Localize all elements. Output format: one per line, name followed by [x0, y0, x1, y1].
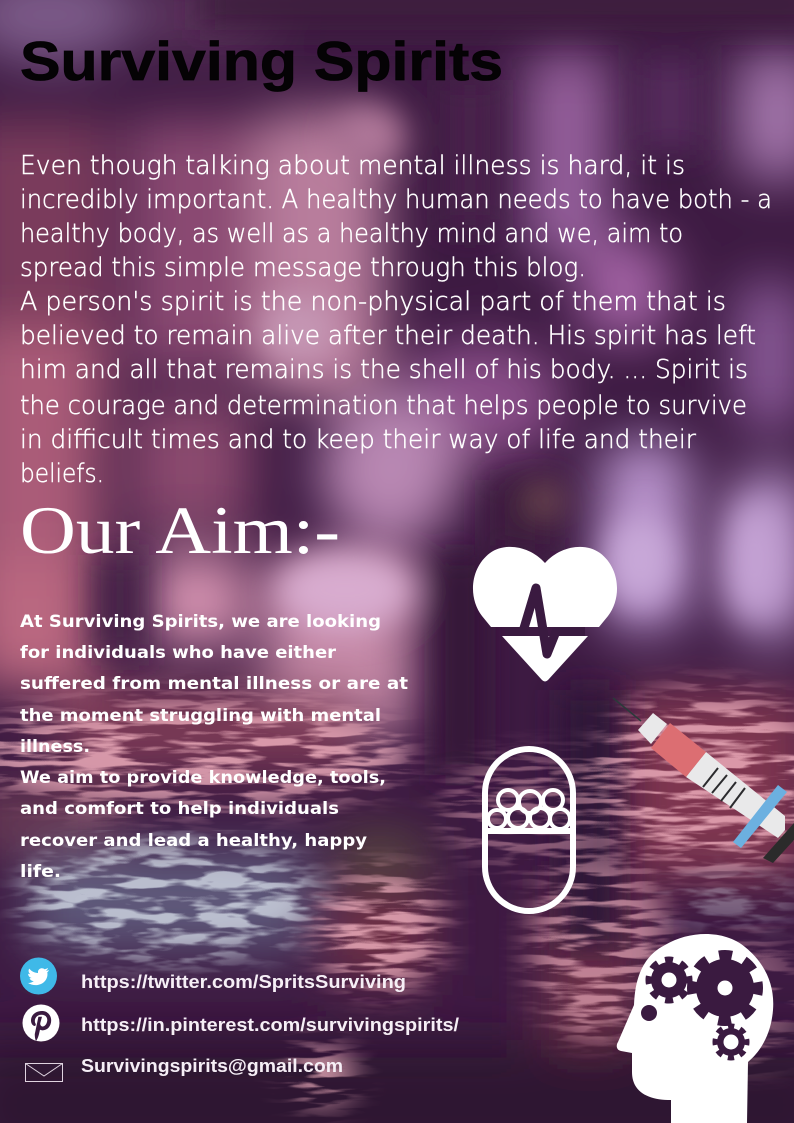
icon: capsule with pills: [485, 749, 573, 911]
icon: head with gears: [617, 934, 773, 1123]
intro paragraph: the courage and determination that helps people to survive: [20, 391, 747, 421]
aim paragraph: [20, 612, 408, 882]
twitter link: https://twitter.com/SpritsSurviving: [81, 972, 406, 992]
aim paragraph: recover and lead a healthy, happy: [20, 831, 367, 851]
icon: pinterest: [22, 1004, 60, 1042]
icon: twitter: [20, 958, 57, 994]
aim paragraph: suffered from mental illness or are at: [20, 674, 408, 694]
intro paragraph: [20, 151, 772, 489]
intro paragraph: him and all that remains is the shell of his body. ... Spirit is: [20, 355, 748, 385]
icon: heart with pulse: [473, 547, 617, 682]
aim paragraph: for individuals who have either: [20, 643, 337, 663]
aim paragraph: illness.: [20, 737, 90, 757]
aim paragraph: life.: [20, 862, 61, 882]
intro paragraph: Even though talking about mental illness is hard, it is: [20, 151, 685, 181]
icon: syringe: [613, 698, 794, 863]
aim paragraph: and comfort to help individuals: [20, 799, 339, 819]
intro paragraph: beliefs.: [20, 459, 104, 489]
title: Surviving Spirits: [20, 30, 503, 92]
icon: envelope: [26, 1064, 62, 1082]
intro paragraph: in difficult times and to keep their way of life and their: [20, 425, 696, 455]
pinterest link: https://in.pinterest.com/survivingspirits/: [81, 1015, 459, 1035]
intro paragraph: believed to remain alive after their death. His spirit has left: [20, 321, 756, 351]
aim paragraph: At Surviving Spirits, we are looking: [20, 612, 381, 632]
intro paragraph: healthy body, as well as a healthy mind and we, aim to: [20, 219, 683, 249]
intro paragraph: spread this simple message through this blog.: [20, 253, 586, 283]
intro paragraph: A person's spirit is the non-physical part of them that is: [20, 287, 726, 317]
aim paragraph: the moment struggling with mental: [20, 706, 381, 726]
aim paragraph: We aim to provide knowledge, tools,: [20, 768, 386, 788]
email link: Survivingspirits@gmail.com: [81, 1056, 343, 1076]
heading: Our Aim: Our Aim:-: [20, 492, 340, 568]
